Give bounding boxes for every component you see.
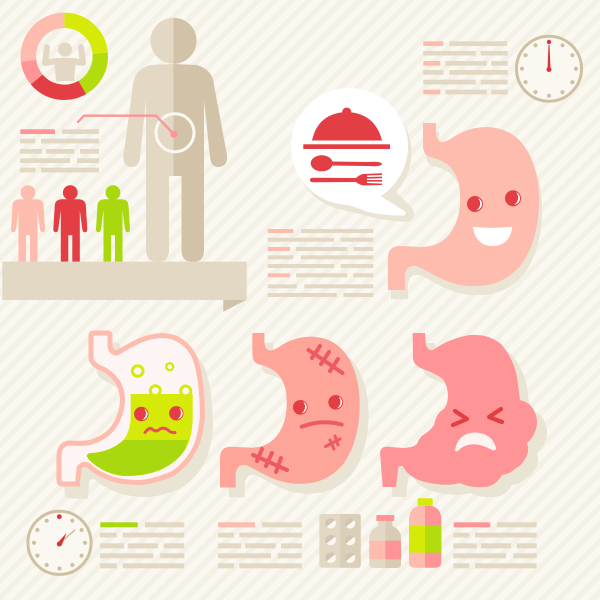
large human figure — [123, 18, 227, 262]
donut chart — [28, 20, 100, 92]
ribbon banner — [2, 262, 247, 312]
text block: middle — [268, 229, 373, 297]
icon: clock bottom left — [28, 511, 91, 574]
text block: top right — [423, 41, 508, 94]
text block: figure callout — [20, 129, 99, 172]
small figure: red — [53, 185, 87, 262]
text block: bottom centre — [218, 522, 302, 568]
stomach: scarred — [220, 333, 369, 497]
speech bubble — [291, 88, 414, 222]
icon: large bottle — [409, 498, 441, 568]
stomach: bloated — [380, 333, 547, 497]
icon: muscle man — [45, 42, 83, 81]
icon: pill blister pack — [319, 514, 361, 568]
stomach: healthy — [388, 123, 542, 299]
icon: cloche and cutlery — [303, 108, 390, 186]
text block: bottom right — [453, 522, 537, 568]
stomach marker and callout line — [77, 114, 194, 152]
text block: bottom left — [100, 522, 184, 568]
icon: small bottle — [369, 515, 401, 568]
icon: clock top right — [516, 36, 582, 101]
stomach: acid — [59, 333, 210, 496]
small figure: pink — [11, 185, 45, 262]
small figure: green — [96, 185, 130, 262]
